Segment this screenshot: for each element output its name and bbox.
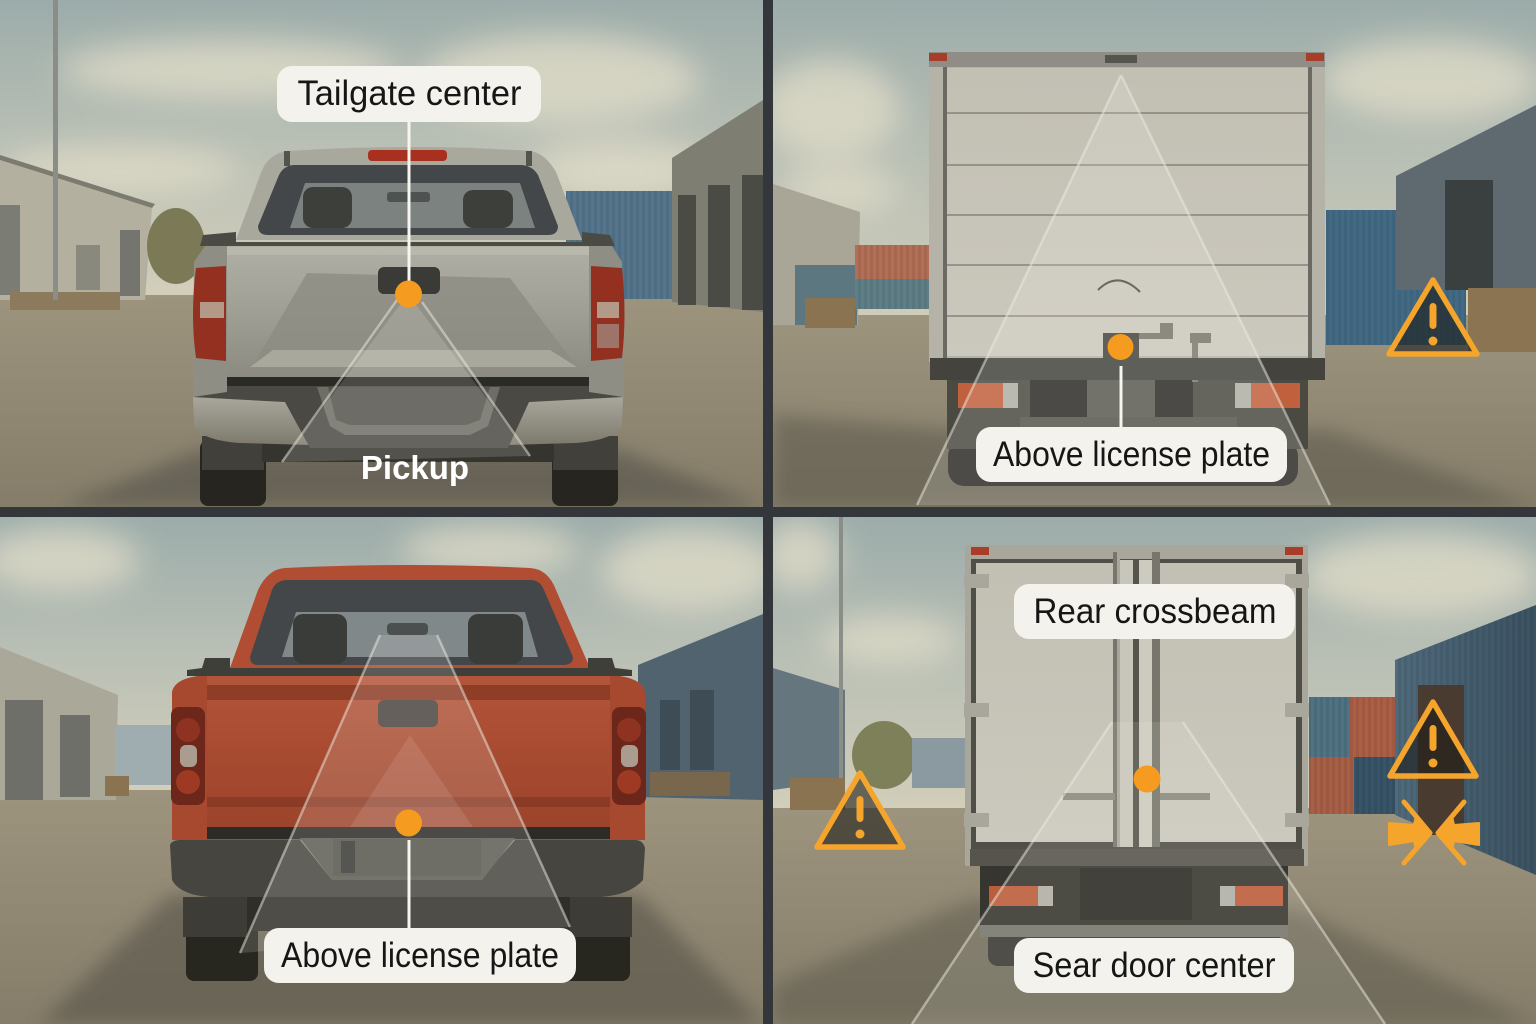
label: rear crossbeam: Rear crossbeam bbox=[1034, 592, 1276, 631]
caption: pickup: Pickup bbox=[361, 449, 469, 486]
squeeze arrows icon bbox=[1389, 802, 1479, 863]
bumper bbox=[207, 827, 610, 839]
rear bumper bar bbox=[970, 849, 1304, 866]
yard background bbox=[0, 0, 763, 507]
camera view cone bbox=[912, 722, 1385, 1024]
label: sear door center bbox=[1014, 938, 1294, 993]
rear window bbox=[258, 165, 558, 235]
taillights bbox=[193, 266, 624, 361]
brake light bbox=[368, 150, 447, 161]
box truck bbox=[964, 545, 1309, 966]
red pickup truck bbox=[170, 565, 646, 981]
camera view cone bbox=[282, 294, 530, 462]
camera position dot bbox=[1108, 334, 1134, 360]
rear window bbox=[250, 580, 573, 665]
bumper bbox=[193, 397, 310, 445]
yard background bbox=[0, 517, 780, 1024]
camera view cone bbox=[240, 635, 570, 953]
camera position dot bbox=[1134, 766, 1160, 792]
yard background bbox=[760, 0, 1536, 507]
panel: box truck, rear crossbeam and door center bbox=[760, 517, 1536, 1024]
tailgate bbox=[207, 676, 610, 827]
rear panel bbox=[947, 68, 1308, 356]
warning icon bbox=[1389, 280, 1477, 354]
camera position dot bbox=[395, 280, 422, 308]
pointer line bbox=[408, 121, 410, 285]
rear doors bbox=[976, 563, 1296, 842]
panel: red pickup, above license plate bbox=[0, 517, 780, 1024]
door bars bbox=[1063, 552, 1210, 847]
label: above license plate bbox=[264, 928, 576, 983]
warning icon: left bbox=[817, 773, 903, 847]
tailgate handle bbox=[378, 267, 440, 294]
tail lamps bbox=[989, 886, 1283, 906]
label: tailgate center: Tailgate center bbox=[298, 74, 522, 113]
hinges bbox=[964, 574, 1309, 827]
label: sear door center: Sear door center bbox=[1032, 946, 1276, 985]
taillights bbox=[171, 707, 646, 805]
warning icon: right bbox=[1390, 702, 1476, 776]
label: above license plate: Above license plate bbox=[993, 435, 1270, 474]
camera position dot bbox=[395, 810, 422, 836]
label: above license plate: Above license plate bbox=[281, 936, 559, 975]
rear bumper bar bbox=[930, 358, 1325, 380]
tail lamps bbox=[958, 383, 1300, 408]
box truck bbox=[929, 52, 1325, 486]
label: above license plate bbox=[976, 427, 1287, 482]
yard background bbox=[760, 517, 1536, 1024]
pointer line bbox=[1120, 366, 1122, 428]
silver pickup truck bbox=[193, 147, 624, 506]
label: tailgate center bbox=[277, 66, 541, 122]
label: rear crossbeam bbox=[1014, 584, 1295, 639]
door hardware bbox=[1103, 323, 1211, 382]
tailgate handle bbox=[378, 700, 438, 727]
panel: box truck, above license plate bbox=[760, 0, 1536, 507]
tailgate bbox=[227, 246, 589, 340]
pointer line bbox=[408, 840, 410, 929]
camera view cone bbox=[917, 75, 1330, 505]
panel: pickup, tailgate center bbox=[0, 0, 763, 507]
